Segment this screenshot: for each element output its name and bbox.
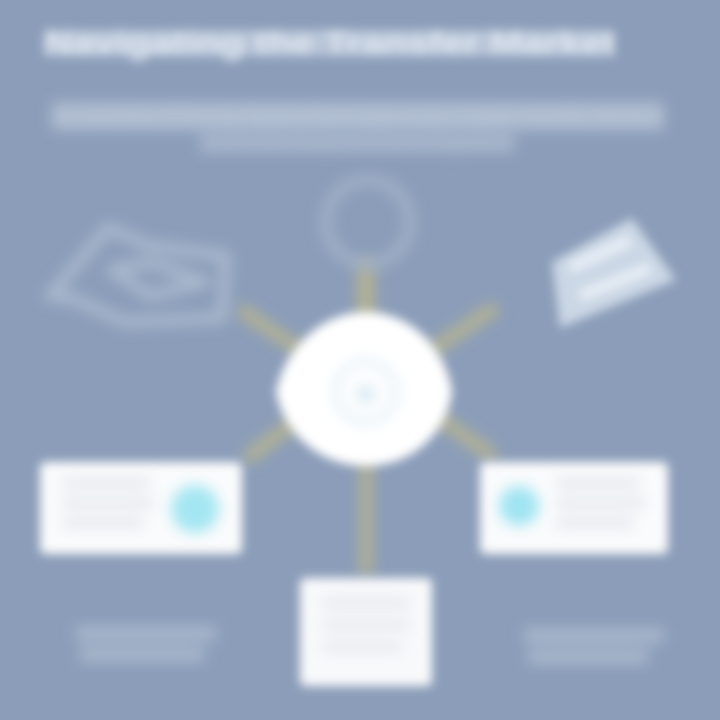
icon: cyan circle: [171, 485, 219, 533]
icon: center glyph: [336, 362, 396, 422]
icon: top circle outline: [326, 180, 410, 264]
text block bottom: [322, 598, 410, 652]
panel: right card: [480, 462, 668, 554]
text block: bottom left: [76, 626, 216, 662]
subtitle text: and how they connect together: [200, 137, 516, 154]
panel: left card: [40, 462, 242, 554]
icon: right tilted card: [552, 218, 676, 328]
icon: left outline shape: [50, 228, 226, 322]
panel: bottom card: [300, 578, 432, 686]
text block: bottom right: [524, 628, 664, 664]
connector arrows: [244, 268, 492, 570]
center circle: [276, 312, 452, 466]
title: Navigating the Transfer Market: [44, 24, 616, 61]
subtitle text: [52, 102, 664, 154]
text block right: [556, 478, 646, 528]
text block: [62, 478, 154, 528]
icon: cyan circle right: [499, 486, 539, 526]
subtitle text: An overview of the key factors that shape every modern transfer decision: [52, 107, 664, 129]
